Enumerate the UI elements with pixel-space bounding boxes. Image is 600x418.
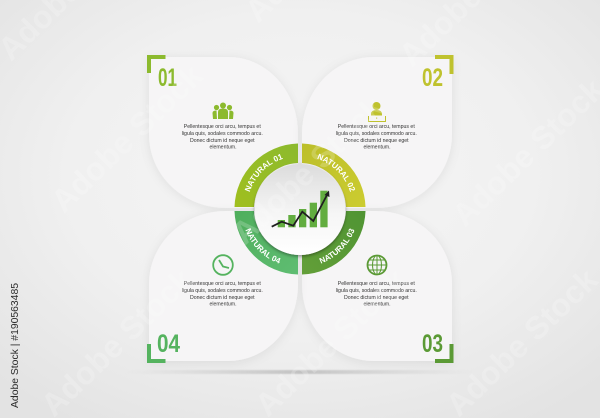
leaf shape 01 — [149, 57, 298, 208]
bracket 04 — [147, 344, 166, 363]
text block 03: Pellentesque orci arcu, tempus et — [338, 281, 415, 287]
panel: leaf 01 — [147, 55, 298, 208]
floor shadow — [125, 370, 475, 374]
number 04: 04 — [157, 330, 180, 358]
number 03: 03 — [422, 330, 443, 358]
icon: user — [368, 102, 386, 122]
text block 03: Donec dictum id neque eget — [344, 295, 409, 301]
number 01: 01 — [158, 64, 177, 92]
watermarks: Adobe Stock — [44, 57, 210, 219]
stock id side label: Adobe Stock | #190563485 — [9, 283, 21, 408]
panel: leaf 03 — [302, 211, 454, 363]
bar chart — [278, 191, 328, 227]
text block 04: elementum. — [209, 302, 237, 308]
bracket 03 — [435, 344, 454, 363]
leaf shape 04 — [149, 211, 298, 361]
segment: natural 02: NATURAL 02 — [317, 154, 355, 192]
text block 02: ligula quis, sodales commodo arcu. — [336, 131, 417, 137]
text block 02: Donec dictum id neque eget — [344, 138, 409, 144]
bracket 02 — [435, 55, 454, 74]
text block 04: ligula quis, sodales commodo arcu. — [182, 288, 263, 294]
text block 02: elementum. — [363, 145, 391, 151]
ring chart — [234, 144, 366, 274]
text block 04: Pellentesque orci arcu, tempus et — [184, 281, 261, 287]
segment: natural 01: NATURAL 01 — [244, 154, 283, 192]
segment: natural 03: NATURAL 03 — [319, 228, 354, 264]
text block 01: elementum. — [209, 145, 237, 151]
panel: leaf 02 — [302, 55, 454, 208]
trend arrow — [272, 190, 330, 227]
watermarks: Adobe Stock — [225, 89, 391, 251]
number 02: 02 — [422, 64, 443, 92]
leaf shape 03 — [302, 211, 452, 361]
icon: people — [212, 102, 234, 119]
text block 01: Donec dictum id neque eget — [190, 138, 255, 144]
text block 03: elementum. — [363, 302, 391, 308]
text block 01: ligula quis, sodales commodo arcu. — [182, 131, 263, 137]
bracket 01 — [147, 55, 166, 73]
text block 03: ligula quis, sodales commodo arcu. — [336, 288, 417, 294]
centre hub — [254, 164, 346, 255]
text block 02: Pellentesque orci arcu, tempus et — [338, 124, 415, 130]
text block 01: Pellentesque orci arcu, tempus et — [184, 124, 261, 130]
icon: globe — [368, 256, 386, 274]
panel: leaf 04 — [147, 211, 298, 363]
segment: natural 04: NATURAL 04 — [246, 228, 280, 264]
leaf shape 02 — [302, 57, 452, 208]
icon: clock — [213, 255, 233, 275]
text block 04: Donec dictum id neque eget — [190, 295, 255, 301]
